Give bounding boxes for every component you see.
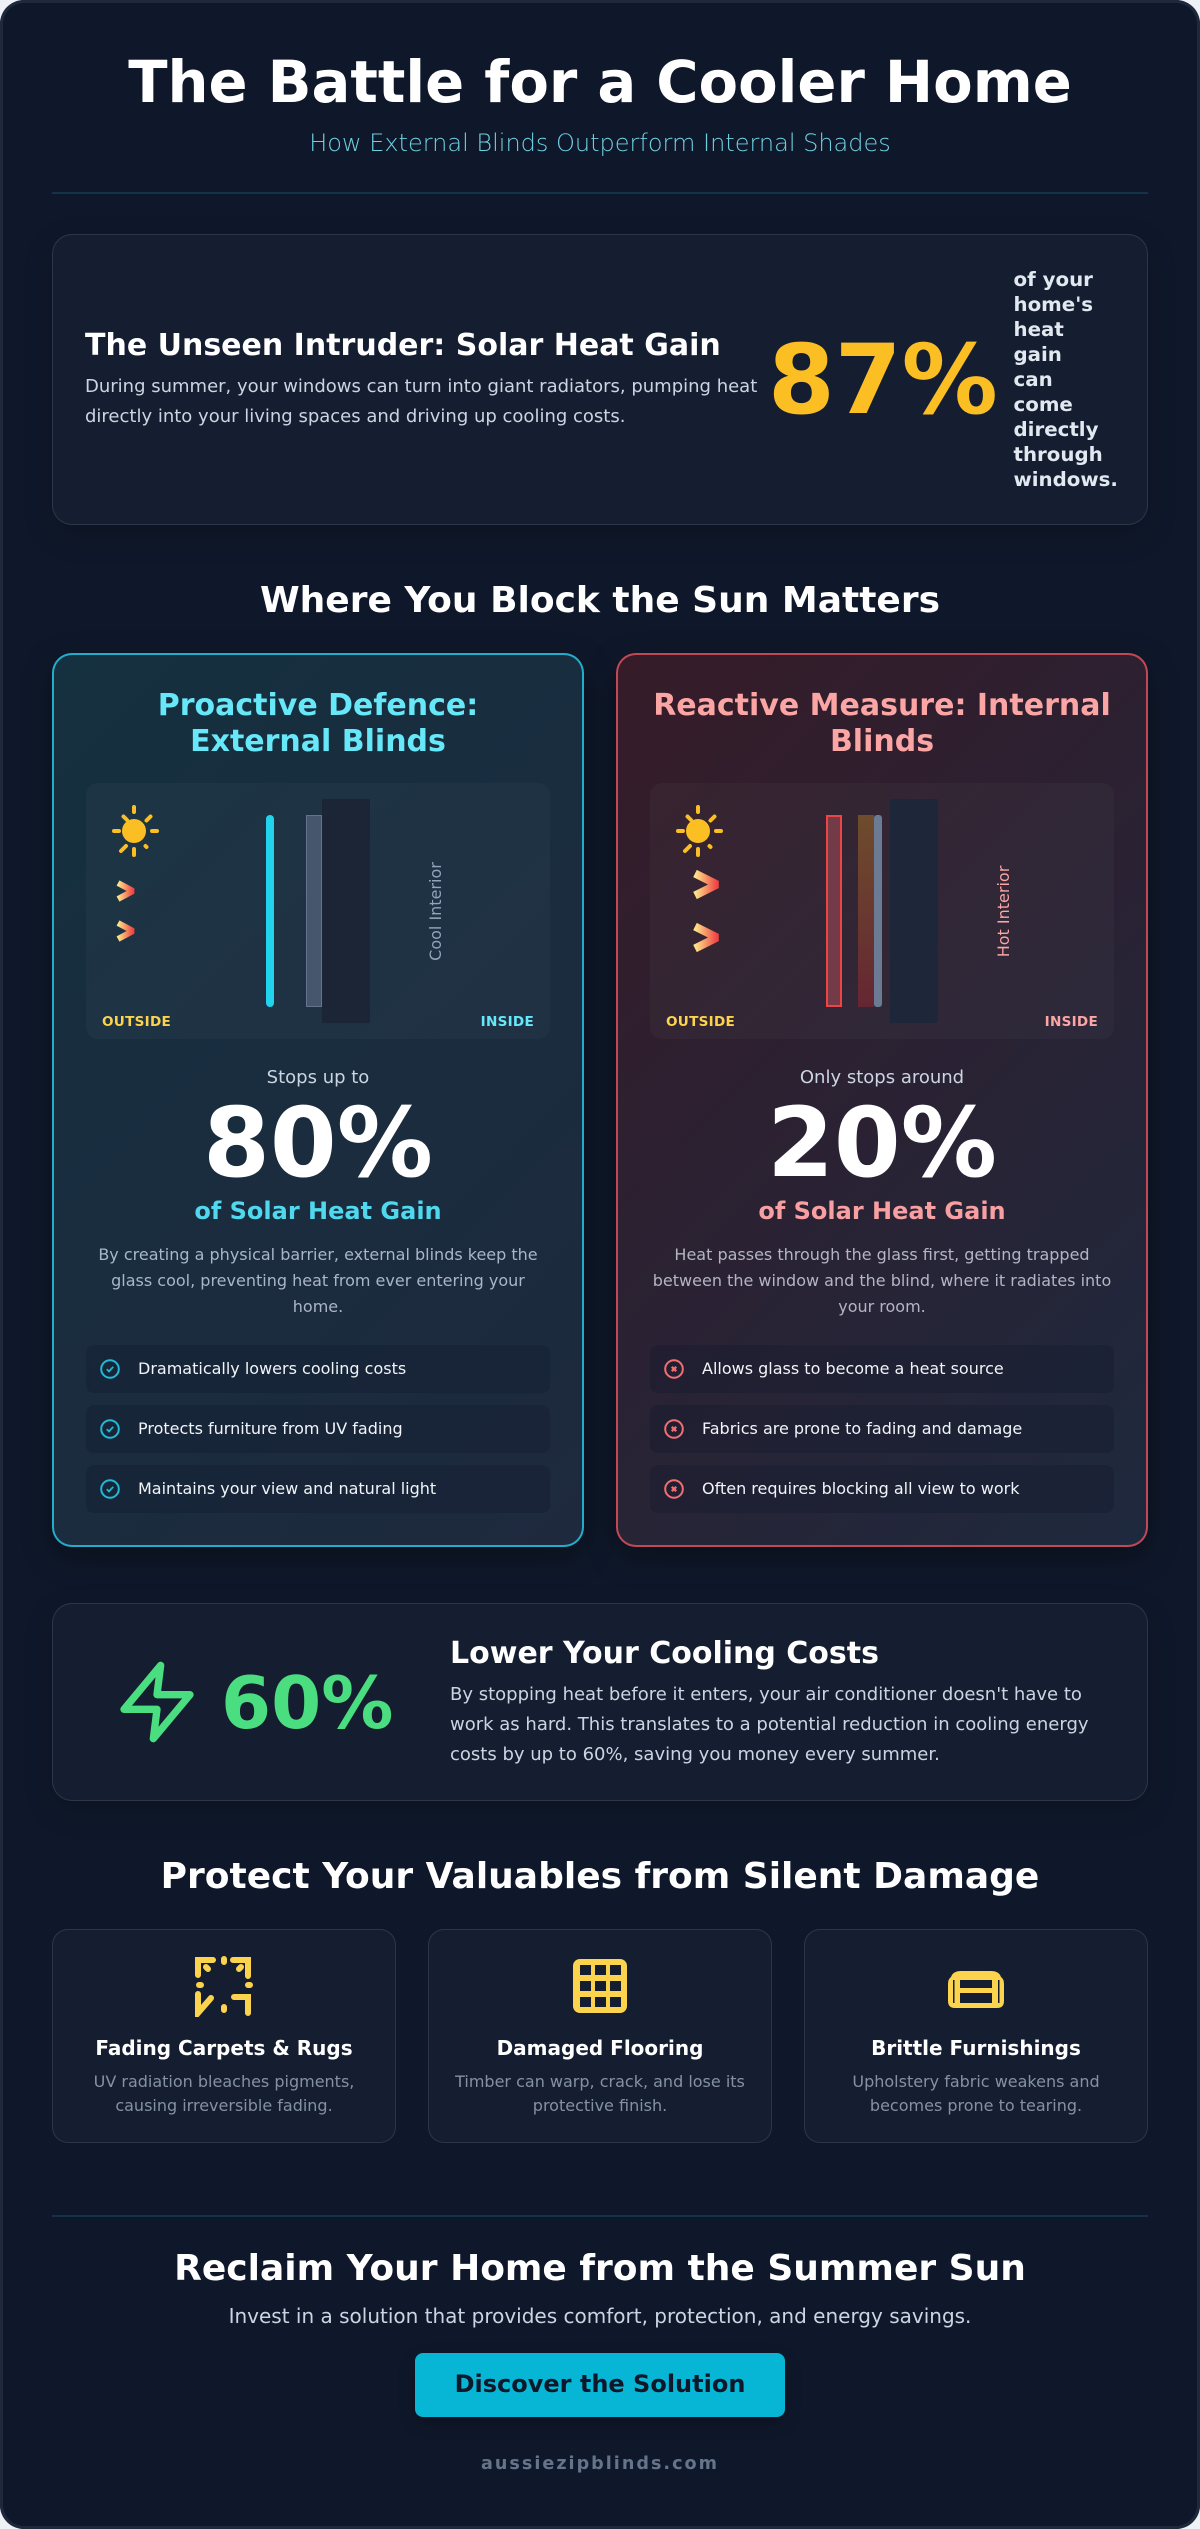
diagram artwork: OUTSIDE (666, 1014, 735, 1030)
diagram: external blinds (86, 783, 550, 1039)
diagram artwork (666, 799, 1098, 1030)
lead-in: Stops up to (267, 1067, 369, 1088)
diagram artwork (102, 799, 534, 1030)
stat caption: gain (1014, 343, 1062, 366)
call-to-action button (415, 2353, 785, 2417)
closing text: Invest in a solution that provides comfort, protection, and energy savings. (229, 2304, 971, 2328)
benefit 3 (86, 1465, 550, 1513)
subtitle: How External Blinds Outperform Internal Shades (309, 129, 891, 157)
flooring text: Timber can warp, crack, and lose its (455, 2072, 745, 2090)
panel: solar heat gain intro (52, 234, 1148, 525)
description (98, 1245, 538, 1316)
call-to-action button: Discover the Solution (455, 2370, 745, 2398)
external heading (158, 688, 478, 759)
diagram artwork: OUTSIDE (102, 1014, 171, 1030)
benefit 1: Dramatically lowers cooling costs (138, 1359, 406, 1378)
benefit 2 (86, 1405, 550, 1453)
section heading: where you block: Where You Block the Sun Matters (260, 580, 940, 621)
furnishing text: Upholstery fabric weakens and (852, 2072, 1100, 2090)
stat: 87%: 87% (768, 324, 998, 436)
intro text (85, 376, 757, 427)
section heading: protect valuables: Protect Your Valuables from Silent Damage (161, 1856, 1039, 1897)
internal heading: Reactive Measure: Internal (653, 688, 1111, 723)
icon: floor grid (573, 1959, 627, 2013)
costs heading: Lower Your Cooling Costs (450, 1636, 879, 1671)
website: aussiezipblinds.com (481, 2454, 719, 2474)
flooring text (455, 2072, 745, 2114)
diagram: internal blinds (650, 783, 1114, 1039)
description: glass cool, preventing heat from ever entering your (111, 1271, 525, 1290)
icon: lightning bolt (120, 1662, 194, 1742)
description: By creating a physical barrier, external blinds keep the (98, 1245, 538, 1264)
title: The Battle for a Cooler Home (128, 49, 1072, 116)
benefit 1 (86, 1345, 550, 1393)
furnishing text (852, 2072, 1100, 2114)
diagram artwork: Hot Interior (994, 865, 1013, 957)
panel: cooling costs (52, 1603, 1148, 1801)
stat caption: windows. (1014, 468, 1118, 491)
costs text: work as hard. This translates to a potential reduction in cooling energy (450, 1714, 1089, 1735)
description: your room. (838, 1297, 926, 1316)
description: home. (293, 1297, 343, 1316)
external heading: Proactive Defence: (158, 688, 478, 723)
stat caption: heat (1014, 318, 1064, 341)
intro heading: The Unseen Intruder: Solar Heat Gain (85, 328, 721, 363)
drawback 3: Often requires blocking all view to work (702, 1479, 1019, 1498)
stat caption: of your (1014, 268, 1093, 291)
card: brittle furnishings (804, 1929, 1148, 2143)
icon: carpet corners (195, 1956, 253, 2017)
stat caption: through (1014, 443, 1103, 466)
closing heading: Reclaim Your Home from the Summer Sun (174, 2248, 1026, 2289)
icon: furnishing (948, 1971, 1004, 2008)
stat label: of Solar Heat Gain (758, 1197, 1006, 1225)
costs text (450, 1684, 1089, 1765)
furnishing heading: Brittle Furnishings (871, 2036, 1081, 2060)
external heading: External Blinds (190, 724, 446, 759)
description (653, 1245, 1111, 1316)
stat caption: come (1014, 393, 1073, 416)
stat: 60%: 60% (221, 1661, 393, 1745)
panel: internal blinds (616, 653, 1148, 1547)
diagram artwork: Cool Interior (426, 862, 445, 961)
stat: 80%: 80% (203, 1087, 433, 1199)
costs text: By stopping heat before it enters, your air conditioner doesn't have to (450, 1684, 1082, 1705)
description: Heat passes through the glass first, getting trapped (674, 1245, 1090, 1264)
internal heading (653, 688, 1111, 759)
carpet text: UV radiation bleaches pigments, (94, 2072, 354, 2090)
benefit 3: Maintains your view and natural light (138, 1479, 436, 1498)
stat caption: directly (1014, 418, 1098, 441)
drawback 3 (650, 1465, 1114, 1513)
stat caption: home's (1014, 293, 1093, 316)
drawback 2 (650, 1405, 1114, 1453)
lead-in: Only stops around (800, 1067, 964, 1088)
carpet heading: Fading Carpets & Rugs (95, 2036, 353, 2060)
drawback 2: Fabrics are prone to fading and damage (702, 1419, 1022, 1438)
drawback 1: Allows glass to become a heat source (702, 1359, 1004, 1378)
flooring text: protective finish. (533, 2096, 667, 2114)
panel: external blinds (52, 653, 584, 1547)
internal heading: Blinds (830, 724, 934, 759)
costs text: costs by up to 60%, saving you money every summer. (450, 1744, 940, 1765)
carpet text: causing irreversible fading. (115, 2096, 333, 2114)
flooring heading: Damaged Flooring (497, 2036, 703, 2060)
description: between the window and the blind, where it radiates into (653, 1271, 1111, 1290)
intro text: During summer, your windows can turn into giant radiators, pumping heat (85, 376, 757, 397)
furnishing text: becomes prone to tearing. (870, 2096, 1082, 2114)
diagram artwork: INSIDE (1045, 1014, 1098, 1030)
card: fading carpets (52, 1929, 396, 2143)
stat label: of Solar Heat Gain (194, 1197, 442, 1225)
stat caption: can (1014, 368, 1053, 391)
card: damaged flooring (428, 1929, 772, 2143)
carpet text (94, 2072, 354, 2114)
diagram artwork: INSIDE (481, 1014, 534, 1030)
stat caption (1014, 268, 1118, 491)
benefit 2: Protects furniture from UV fading (138, 1419, 403, 1438)
stat: 20%: 20% (767, 1087, 997, 1199)
drawback 1 (650, 1345, 1114, 1393)
intro text: directly into your living spaces and driving up cooling costs. (85, 406, 625, 427)
